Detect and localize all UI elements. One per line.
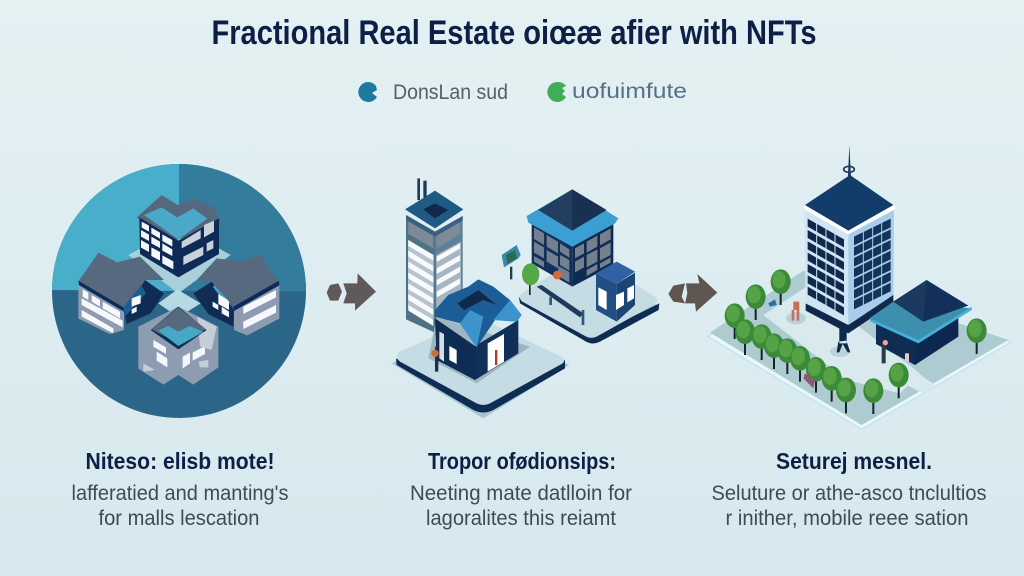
back building — [527, 189, 618, 287]
text block: column 3 — [712, 448, 986, 530]
house: top — [137, 195, 222, 277]
panel: right campus — [708, 145, 1012, 429]
pie chart circle — [52, 164, 306, 418]
body text: for malls lescation — [98, 507, 260, 530]
heading: Tropor ofødionsips: — [428, 448, 616, 474]
panel: pie circle with four houses — [52, 164, 306, 418]
heading: Seturej mesnel. — [776, 448, 932, 474]
body text: lagoralites this reiamt — [426, 507, 616, 530]
house: right — [193, 254, 279, 335]
body text: r inither, mobile reee sation — [726, 507, 968, 530]
kiosk — [596, 262, 635, 322]
back platform — [519, 253, 659, 344]
heading: Niteso: elisb mote! — [86, 448, 274, 474]
small building — [869, 280, 972, 365]
house: bottom — [138, 307, 218, 385]
tower — [405, 178, 463, 333]
body text: Seluture or athe-asco tnclultios — [712, 482, 986, 505]
legend — [358, 80, 687, 104]
people — [768, 299, 909, 388]
trees — [725, 269, 987, 414]
front platform — [392, 317, 569, 418]
panel: middle buildings — [392, 178, 659, 418]
front house — [428, 279, 530, 383]
body text: Neeting mate datlloin for — [410, 482, 632, 505]
campus ground — [708, 271, 1012, 429]
centre platform — [128, 227, 231, 317]
legend icon: green — [547, 82, 566, 102]
text block: column 1 — [72, 448, 288, 530]
arrow: first — [327, 273, 376, 311]
title: Fractional Real Estate oiœæ afier with NFTs — [212, 14, 816, 52]
tall tower — [804, 145, 895, 333]
legend label: blue: DonsLan sud — [393, 81, 508, 104]
body text: lafferatied and manting's — [72, 482, 288, 505]
legend label: green: uofuimfute — [572, 80, 687, 103]
sign, tree, people and bench — [502, 245, 584, 325]
arrow: second — [668, 274, 717, 312]
legend icon: blue — [358, 82, 377, 102]
house: left — [78, 253, 164, 334]
text block: column 2 — [410, 448, 632, 530]
